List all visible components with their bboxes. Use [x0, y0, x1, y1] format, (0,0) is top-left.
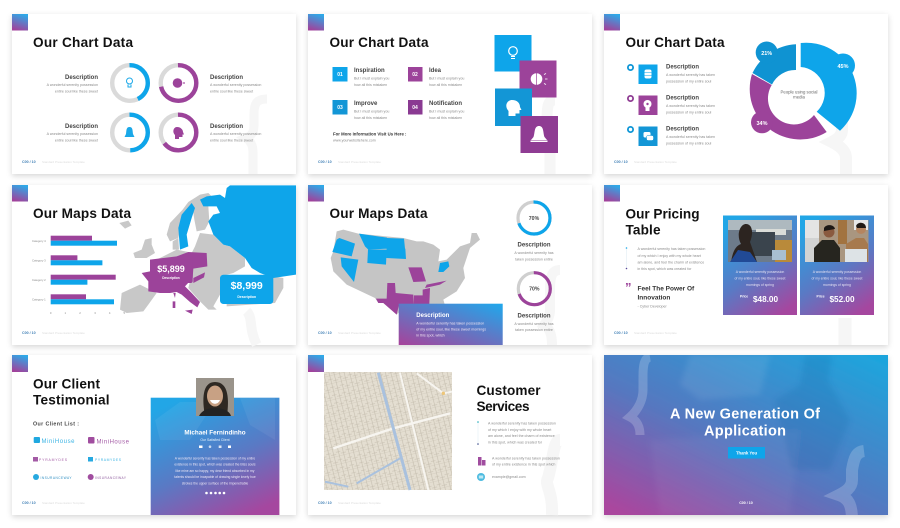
- tile: brain: [520, 60, 556, 98]
- pricing card 2: [800, 216, 874, 315]
- testimonial card: strokes the upper surface of the impenetrable: [182, 482, 248, 486]
- western grey countries: [119, 221, 296, 313]
- footer: C00 / 10: [318, 160, 332, 164]
- client logos: PYRAMYDES: [95, 458, 122, 462]
- headline: Application: [704, 424, 786, 440]
- description text top right: Description: [210, 75, 243, 81]
- street map: [324, 372, 452, 490]
- Sweden: [178, 203, 195, 250]
- icon: email circle: [477, 473, 485, 481]
- photo texture and brace watermarks: [630, 355, 864, 520]
- paragraph with timeline: am alone, and feel the charm of existence: [488, 434, 555, 438]
- Russia: [200, 185, 296, 278]
- footer: C00 / 10: [739, 501, 753, 505]
- ring 70% blue: [518, 202, 550, 234]
- description text bottom left: Description: [65, 124, 98, 130]
- description text bottom left: A wonderful serenity possession: [47, 132, 98, 136]
- description text bottom left: [47, 124, 98, 142]
- segment 34%: [750, 74, 827, 139]
- item 04: how all this mistaken: [429, 116, 462, 120]
- item 02: 02: [412, 72, 418, 78]
- testimonial card: A wonderful serenity has taken possession of my entire: [175, 456, 255, 460]
- tile: head: [495, 88, 532, 126]
- donut: bell 50%: [112, 115, 148, 150]
- description text bottom left: entire soul like these sweet: [55, 138, 98, 142]
- callout $5,899: $5,899: [157, 264, 185, 274]
- item 01: But I must explain you: [354, 76, 389, 80]
- description text top left: entire soul like these sweet: [55, 90, 98, 94]
- testimonial card: talents should be incapable of drawing single lovely hue: [174, 475, 256, 479]
- item 03: Improve: [354, 101, 378, 107]
- footer: [614, 331, 677, 335]
- pricing card 2: A wonderful serenity possession: [813, 270, 861, 274]
- callout $5,899: [150, 260, 193, 283]
- testimonial card: like mine am so happy, my dear friend absorbed in my: [176, 469, 255, 473]
- corner accent square: [604, 14, 620, 30]
- row: database: Description: [666, 64, 699, 70]
- description under purple ring: Description: [517, 314, 551, 320]
- footer: [318, 160, 381, 164]
- title: [476, 383, 541, 414]
- testimonial card: existence in this spot, which was created the bliss souls: [174, 462, 256, 466]
- panel: maps data Europe: [12, 185, 296, 345]
- pricing card 2: Price: [816, 294, 825, 298]
- description gradient box: of my entire soul, like these sweet mornings: [416, 328, 486, 332]
- segment 45%: [801, 43, 857, 131]
- description under blue ring: A wonderful serenity has: [514, 251, 554, 255]
- item 02: how all this mistaken: [429, 83, 462, 87]
- title: Our Maps Data: [33, 206, 131, 221]
- title: Our Client: [33, 376, 100, 392]
- pricing card 2: of my entire soul, like these sweet: [812, 276, 862, 280]
- pricing card 2: $52.00: [830, 295, 855, 304]
- contact line: [333, 132, 407, 142]
- ring 70% purple: [518, 273, 550, 305]
- ring 70% purple: 70%: [529, 287, 540, 293]
- callout $8,999: [220, 275, 273, 304]
- bar chart: 3: [94, 311, 96, 315]
- quote: - Cyber Developer: [638, 304, 667, 308]
- description text top right: A wonderful serenity possession: [210, 83, 261, 87]
- title: [626, 206, 700, 238]
- paragraph with timeline: A wonderful serenity has taken possession: [488, 422, 556, 426]
- footer: C00 / 10: [318, 501, 332, 505]
- description gradient box: in this spot, which: [416, 334, 445, 338]
- item 04: 04: [412, 105, 418, 111]
- paragraph with timeline: A wonderful serenity has taken possession: [638, 247, 705, 251]
- photo: woman at computer: [728, 220, 792, 262]
- item 03: 03: [337, 105, 343, 111]
- quote: ”: [625, 280, 632, 295]
- description text top left: A wonderful serenity possession: [47, 83, 98, 87]
- ring 70% blue: 70%: [529, 216, 540, 222]
- paragraph with timeline: am alone, and feel the charm of existence: [638, 260, 704, 264]
- description text bottom right: [210, 124, 261, 142]
- purple states: [376, 267, 447, 315]
- description text bottom right: Description: [210, 124, 243, 130]
- footer: Standard Presentation Template: [338, 501, 381, 505]
- footer: [318, 331, 381, 335]
- corner accent square: [12, 185, 28, 202]
- row: chat: Description: [666, 126, 699, 132]
- item 02: Idea: [429, 68, 442, 74]
- map of USA: [331, 230, 480, 315]
- blue states: [332, 234, 449, 282]
- segment 21%: [752, 44, 796, 84]
- client logos: [33, 437, 130, 480]
- address text: A wonderful serenity has taken possession: [492, 456, 560, 460]
- paragraph with timeline: [626, 247, 705, 271]
- title: Services: [476, 399, 530, 414]
- panel: chart data with numbered items: [308, 14, 592, 174]
- headline: A New Generation Of: [670, 406, 820, 422]
- item 03: how all this mistaken: [354, 116, 387, 120]
- bar chart: [32, 236, 126, 315]
- title: Our Chart Data: [330, 35, 429, 50]
- client logos: MiniHouse: [96, 440, 130, 446]
- contact line: For More Information Visit Us Here :: [333, 132, 407, 136]
- item 04: [408, 100, 464, 120]
- client logos: PYRAMYDES: [39, 458, 68, 462]
- description text bottom right: entire soul like these sweet: [210, 138, 253, 142]
- corner accent square: [604, 185, 620, 202]
- pricing card 1: [723, 216, 797, 315]
- client logos: INSURANCEWAY: [40, 476, 72, 480]
- footer: Standard Presentation Template: [42, 501, 85, 505]
- testimonial card: [151, 378, 279, 515]
- title: Testimonial: [33, 392, 110, 408]
- panel: client testimonial: [12, 355, 296, 515]
- title: Our Chart Data: [626, 35, 725, 50]
- row: chat: possession of my entire soul: [666, 142, 712, 146]
- social icons: [199, 445, 231, 448]
- row: database: [628, 64, 715, 84]
- row: chat: [628, 126, 715, 146]
- footer: Standard Presentation Template: [634, 331, 677, 335]
- item 01: Inspiration: [354, 68, 385, 74]
- description under blue ring: [514, 242, 554, 262]
- description gradient box: A wonderful serenity has taken possession: [416, 322, 484, 326]
- title: Our Chart Data: [33, 35, 133, 50]
- paragraph with timeline: in this spot, which was created for: [488, 440, 543, 444]
- item 01: [332, 67, 389, 87]
- description under purple ring: [514, 314, 554, 332]
- donut chart: [750, 42, 857, 139]
- quote: Feel The Power Of: [638, 286, 695, 292]
- address text: [492, 456, 560, 466]
- footer: C00 / 10: [318, 331, 332, 335]
- panel: chart data with four donuts: [12, 14, 296, 174]
- donut: brain 72%: [161, 65, 196, 101]
- item 02: But I must explain you: [429, 76, 464, 80]
- panel: pricing table: [604, 185, 888, 345]
- footer: C00 / 10: [22, 501, 36, 505]
- corner accent square: [308, 14, 324, 30]
- bar chart: 4: [109, 311, 111, 315]
- portrait photo: [196, 378, 234, 416]
- item 01: how all this mistaken: [354, 83, 387, 87]
- corner accent square: [12, 355, 28, 372]
- footer: Standard Presentation Template: [634, 160, 677, 164]
- client logos: MiniHouse: [42, 439, 75, 445]
- description under purple ring: taken possession entire: [515, 328, 553, 332]
- panel: closing slide: [604, 355, 888, 520]
- bar chart: 5: [124, 311, 126, 315]
- description under purple ring: A wonderful serenity has: [514, 322, 554, 326]
- panel: chart data with segmented donut: [604, 14, 888, 174]
- bubble 21%: 21%: [761, 51, 772, 57]
- USA grey base: [331, 230, 480, 315]
- item 03: But I must explain you: [354, 110, 389, 114]
- footer: C00 / 10: [22, 331, 36, 335]
- bar chart: 2: [79, 311, 81, 315]
- row: idea head: [628, 96, 715, 115]
- client list heading: Our Client List :: [33, 422, 79, 428]
- item 04: But I must explain you: [429, 110, 464, 114]
- description text top left: [47, 75, 98, 94]
- item 03: [332, 100, 389, 120]
- address text: of my entire existence in this spot which: [492, 462, 555, 466]
- bar chart: Category 2: [32, 278, 46, 282]
- description text top left: Description: [65, 75, 98, 81]
- corner accent square: [12, 14, 28, 30]
- description under blue ring: Description: [517, 242, 551, 248]
- bar chart: Category 3: [32, 258, 46, 262]
- testimonial card: Our Satisfied Client: [200, 438, 230, 442]
- pricing card 1: mornings of spring: [746, 283, 774, 287]
- bubble 34%: 34%: [756, 121, 768, 127]
- footer: [22, 501, 85, 505]
- central Europe and Italy: [142, 252, 207, 314]
- footer: C00 / 10: [22, 160, 36, 164]
- footer: C00 / 10: [614, 160, 628, 164]
- testimonial card: Michael Fernindinho: [184, 430, 246, 436]
- footer: Standard Presentation Template: [42, 331, 85, 335]
- item 02: [408, 67, 464, 87]
- callout $8,999: Description: [237, 295, 256, 299]
- title: Table: [626, 222, 661, 238]
- center label: People using social: [780, 90, 818, 94]
- bar chart: 0: [50, 311, 52, 315]
- pricing card 1: A wonderful serenity possession: [736, 270, 784, 274]
- row: chat: A wonderful serenity has taken: [666, 135, 715, 139]
- title: Our Pricing: [626, 206, 700, 222]
- paragraph with timeline: of my which I enjoy with my whole heart: [488, 428, 551, 432]
- panel: maps data USA: [308, 185, 592, 345]
- item 04: Notification: [429, 101, 462, 107]
- paragraph with timeline: [477, 421, 556, 445]
- footer: [318, 501, 381, 505]
- title: Customer: [476, 383, 541, 398]
- paragraph with timeline: of my which I enjoy with my whole heart: [638, 254, 701, 258]
- donut: head 65%: [161, 115, 196, 150]
- center label: media: [793, 94, 805, 100]
- description gradient box: Description: [416, 313, 450, 319]
- pricing card 1: $48.00: [753, 295, 778, 304]
- bar chart: Category 1: [32, 298, 46, 302]
- corner accent square: [308, 185, 324, 202]
- description text bottom right: A wonderful serenity possession: [210, 132, 261, 136]
- pricing card 2: mornings of spring: [823, 283, 851, 287]
- description gradient box: [399, 304, 503, 345]
- email text: example@gmail.com: [492, 475, 526, 479]
- eastern grey countries: [188, 233, 245, 310]
- quote: Innovation: [638, 294, 670, 302]
- item 01: 01: [337, 72, 343, 78]
- pricing card 1: Price: [740, 294, 748, 298]
- row: database: A wonderful serenity has taken: [666, 73, 715, 77]
- description text top right: entire soul like these sweet: [210, 90, 253, 94]
- footer: [614, 160, 677, 164]
- contact line: www.yourwebsitehere.com: [333, 138, 376, 142]
- row: idea head: Description: [666, 96, 699, 102]
- button: Thank You: [736, 450, 757, 456]
- tile: bulb: [494, 35, 532, 72]
- donut: bulb 43%: [112, 65, 148, 101]
- headline: [670, 406, 820, 440]
- button: [728, 447, 765, 458]
- description text top right: [210, 75, 261, 94]
- row: idea head: A wonderful serenity has taken: [666, 104, 715, 108]
- title: Our Maps Data: [330, 206, 428, 221]
- row: idea head: possession of my entire soul: [666, 110, 712, 114]
- bar chart: Category 4: [32, 239, 46, 243]
- corner accent square: [308, 355, 324, 372]
- panel: customer services: [308, 355, 592, 515]
- bar chart: 1: [65, 311, 67, 315]
- footer: [22, 160, 85, 164]
- pricing card 1: of my entire soul, like these sweet: [735, 276, 785, 280]
- callout $8,999: $8,999: [231, 280, 263, 292]
- rating dots: [205, 492, 225, 494]
- description under blue ring: taken possession entire: [515, 258, 553, 262]
- footer: C00 / 10: [614, 331, 628, 335]
- paragraph with timeline: in this spot, which was created for: [638, 267, 692, 271]
- footer: Standard Presentation Template: [338, 331, 381, 335]
- bubble 45%: 45%: [837, 64, 849, 70]
- center label: [780, 90, 818, 100]
- tile: bell: [520, 116, 558, 153]
- footer: Standard Presentation Template: [42, 160, 85, 164]
- footer: [22, 331, 85, 335]
- client logos: INSURANCEWAY: [95, 476, 127, 480]
- quote: [625, 280, 695, 308]
- icon: buildings: [478, 457, 486, 466]
- footer: Standard Presentation Template: [338, 160, 381, 164]
- photo: two men at computer: [805, 220, 868, 262]
- callout $5,899: Description: [162, 276, 180, 280]
- title: [33, 376, 110, 408]
- northern grey countries: [167, 193, 213, 241]
- row: database: possession of my entire soul: [666, 80, 712, 84]
- map of Europe: [119, 185, 296, 345]
